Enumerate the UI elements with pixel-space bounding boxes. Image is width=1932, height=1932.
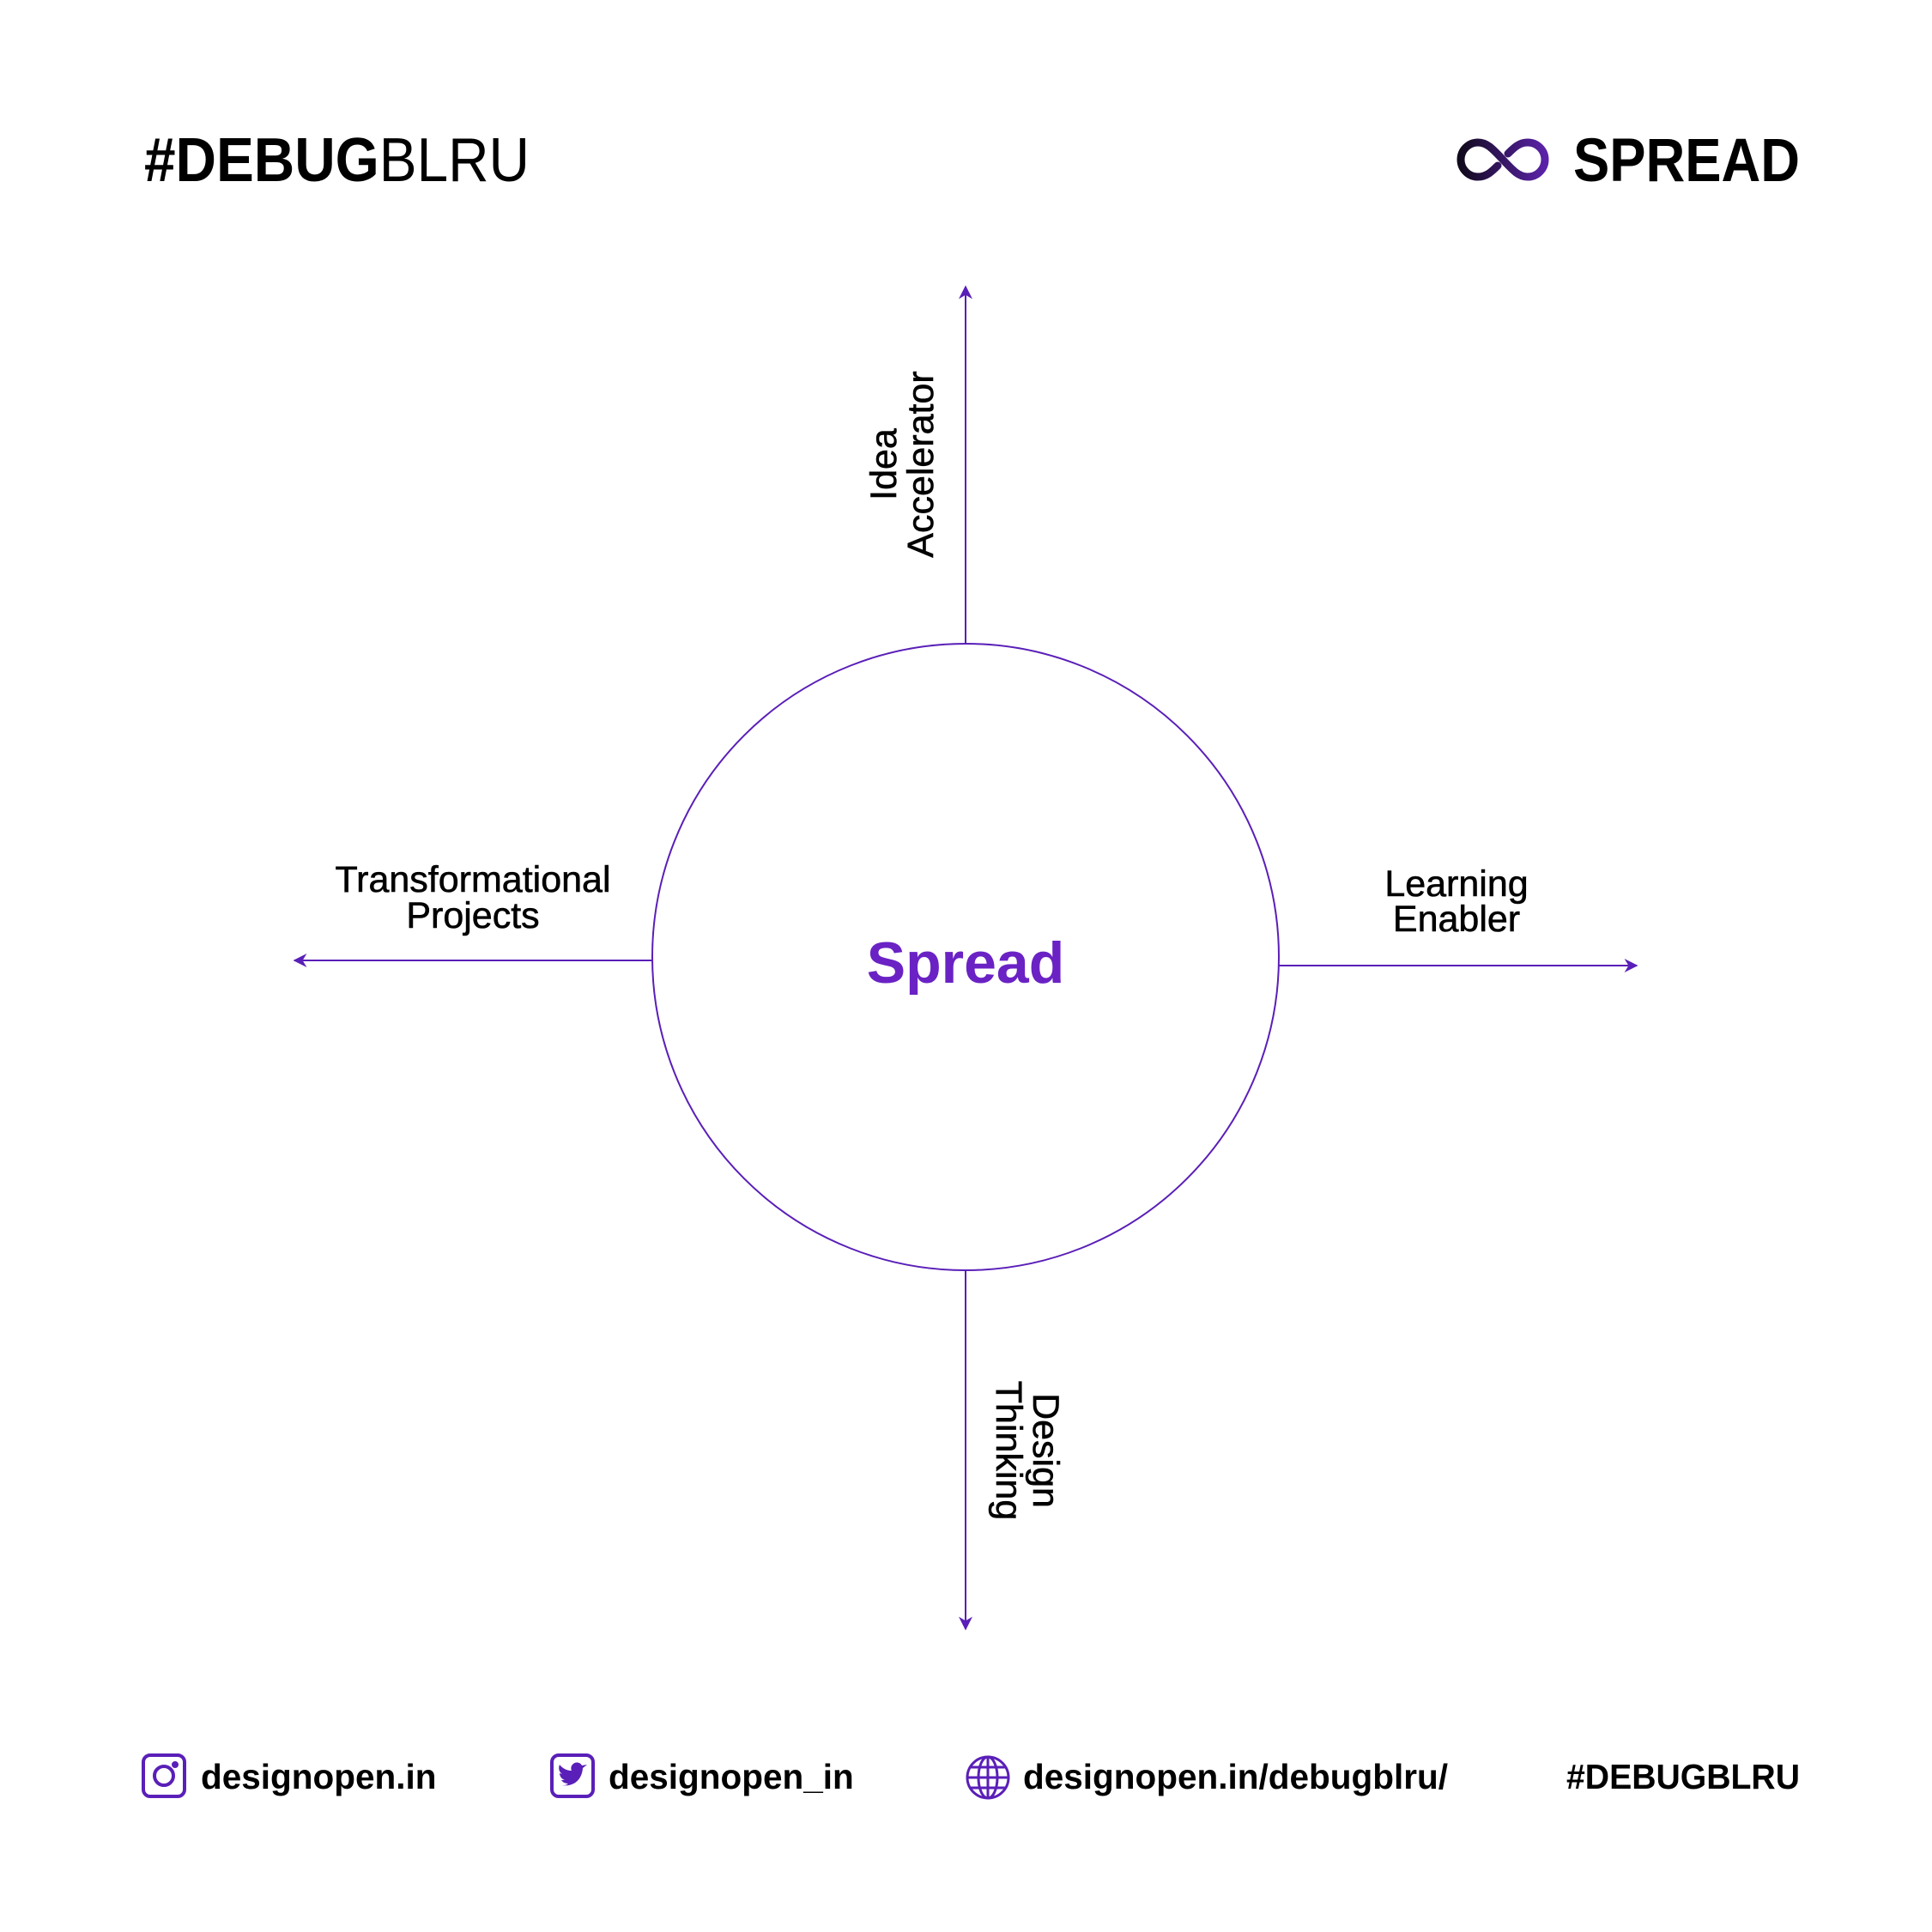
logo text: SPREAD xyxy=(1573,127,1800,195)
icon: globe xyxy=(967,1757,1008,1798)
text: instagram: designopen.in xyxy=(201,1757,437,1796)
label: transformational projects: Transformational xyxy=(335,859,611,900)
arrow: up xyxy=(965,287,966,644)
label: learning enabler: Enabler xyxy=(1393,899,1520,940)
text: website: designopen.in/debugblru/ xyxy=(1023,1757,1448,1796)
label: transformational projects: Projects xyxy=(406,895,540,936)
arrow: left xyxy=(294,960,652,961)
title: #DEBUGBLRU xyxy=(144,126,530,195)
central circle xyxy=(652,644,1279,1270)
label: design thinking: Thinking xyxy=(988,1381,1029,1520)
label: idea accelerator: Idea xyxy=(863,428,905,500)
logo: spread xyxy=(1461,127,1800,195)
label: idea accelerator: Accelerator xyxy=(900,371,942,558)
icon: twitter xyxy=(552,1755,593,1796)
arrow: right xyxy=(1279,965,1637,966)
center label: Spread xyxy=(867,930,1064,996)
icon: instagram xyxy=(143,1755,185,1796)
arrow: down xyxy=(965,1270,966,1629)
text: twitter: designopen_in xyxy=(609,1757,854,1796)
footer xyxy=(143,1755,1800,1798)
label: design thinking: Design xyxy=(1025,1393,1066,1508)
icon: infinity xyxy=(1461,142,1545,177)
text: hashtag: #DEBUGBLRU xyxy=(1566,1757,1800,1796)
label: learning enabler: Learning xyxy=(1384,863,1529,905)
